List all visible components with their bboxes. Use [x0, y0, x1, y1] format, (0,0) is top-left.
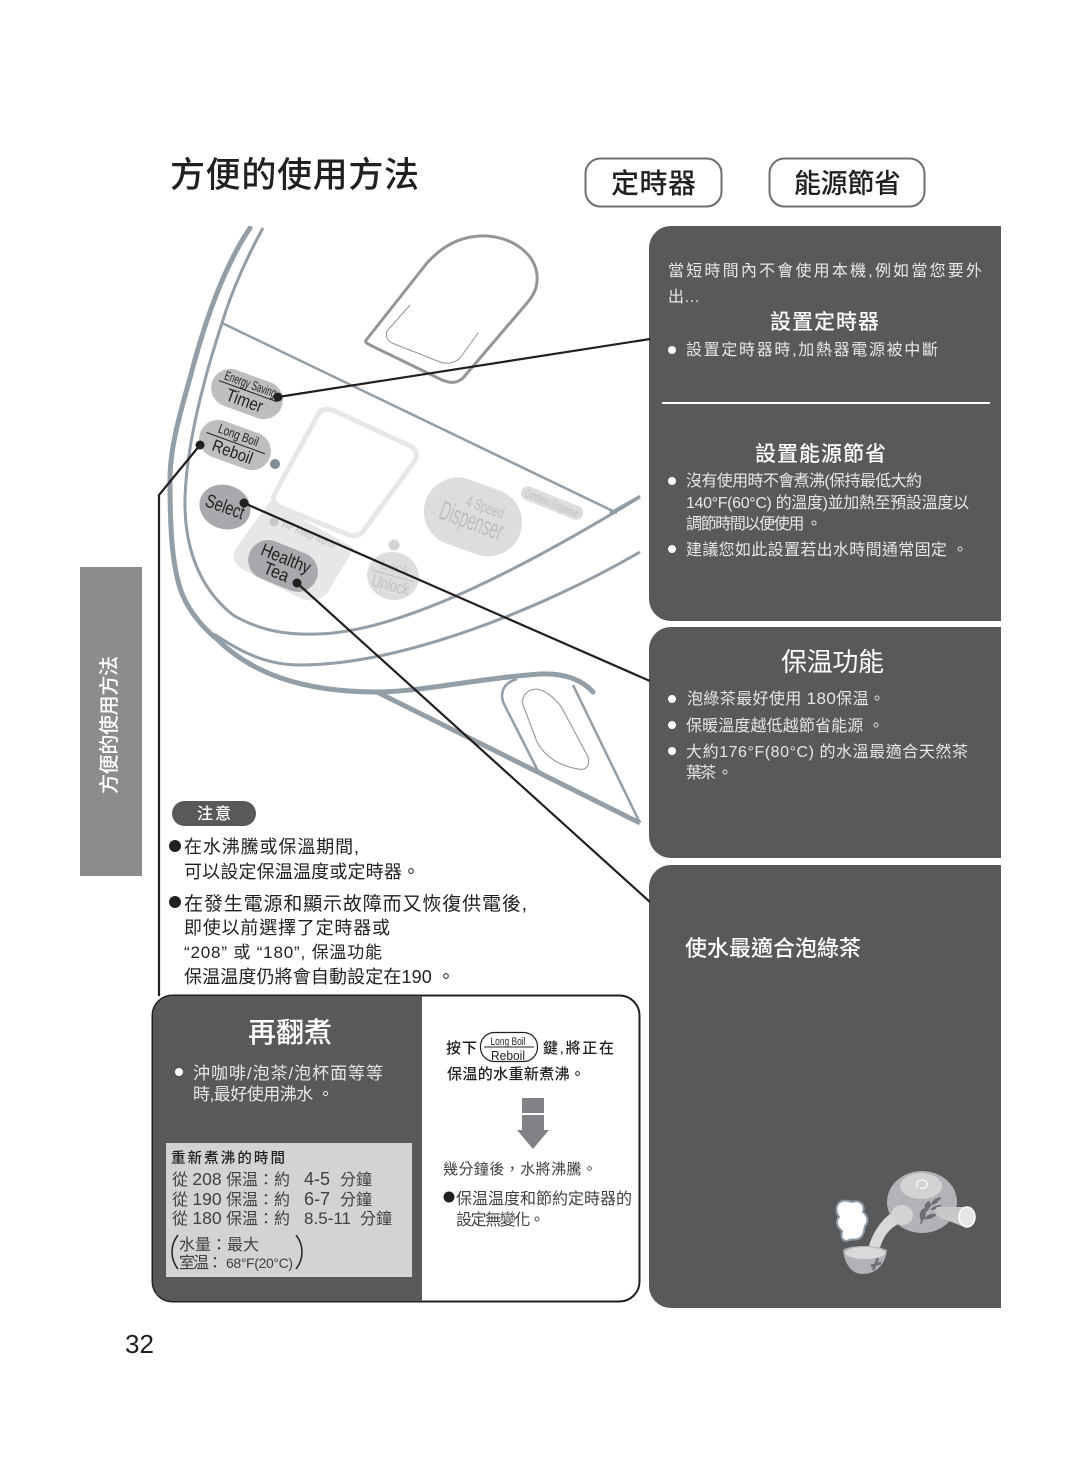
intro text [668, 262, 982, 306]
reboil time table: 分鐘 [360, 1210, 392, 1228]
reboil dark column [153, 996, 422, 1301]
keep-warm area [234, 501, 354, 600]
keep warm notes: 大約176°F(80°C) 的水溫最適合天然茶 [686, 743, 968, 761]
reboil note: 沖咖啡/泡茶/泡杯面等等 [193, 1064, 383, 1083]
button: cordless dispense [521, 486, 583, 520]
reboil time table: 4-5 [304, 1169, 330, 1189]
connector dots [196, 392, 302, 588]
reboil time table: 分鐘 [340, 1171, 372, 1189]
indicator lights [270, 459, 400, 550]
reboil time table: 8.5-11 [304, 1209, 351, 1228]
keep warm notes: 保暖溫度越低越節省能源 。 [686, 716, 884, 735]
energy note one [668, 471, 969, 533]
tag: energy saving: 能源節省 [794, 169, 901, 199]
button: dispenser [424, 478, 522, 556]
instruction: press reboil: Long Boil [490, 1036, 526, 1048]
button: lock unlock [367, 552, 419, 600]
tag: energy saving [770, 158, 924, 206]
heading: reboil: 再翻煮 [248, 1017, 332, 1048]
instruction: press reboil: 保温的水重新煮沸。 [447, 1065, 585, 1083]
energy note two: 建議您如此設置若出水時間通常固定 。 [686, 541, 968, 559]
note two: “208” 或 “180”, 保溫功能 [184, 943, 382, 962]
reboil note [175, 1064, 383, 1104]
notice section [169, 801, 527, 987]
instruction: press reboil: 鍵,將正在 [543, 1039, 614, 1057]
body outlines [170, 228, 640, 823]
button: healthy tea: Healthy [258, 540, 314, 578]
note two: 即使以前選擇了定時器或 [184, 918, 390, 938]
button: long boil reboil: Long Boil [216, 421, 261, 449]
reboil time table: 室温： [179, 1254, 223, 1272]
reboil time table: 6-7 [304, 1189, 330, 1209]
reboil time table: 從 208 保温：約 [172, 1169, 290, 1189]
reboil time table: 重新煮沸的時間 [171, 1149, 285, 1167]
note one: 在水沸騰或保溫期間, [184, 837, 359, 857]
note two: 在發生電源和顯示故障而又恢復供電後, [184, 893, 527, 915]
intro text: 出… [668, 288, 700, 306]
reboil time table: 68°F(20°C) [226, 1255, 293, 1271]
result text: 幾分鐘後，水將沸騰。 [443, 1160, 597, 1178]
side tab: 方便的使用方法 [98, 656, 121, 794]
result note: 保温温度和節約定時器的 [456, 1189, 632, 1208]
panel: best water for green tea [649, 865, 1001, 1308]
panel: reboil [152, 996, 640, 1302]
display window [273, 409, 416, 536]
side tab [80, 567, 142, 876]
result note: 設定無變化。 [456, 1211, 545, 1229]
heading: set timer: 設置定時器 [770, 311, 879, 334]
note one [169, 837, 420, 882]
button: select: Select [202, 491, 248, 524]
panel: keep warm function [649, 627, 1001, 858]
reboil time table: 水量：最大 [179, 1236, 259, 1254]
notice badge [172, 801, 256, 826]
illustration: control panel of the pot [170, 228, 640, 823]
page title: 方便的使用方法 [170, 156, 419, 195]
lid handle [366, 236, 537, 382]
heading: set energy saving: 設置能源節省 [755, 443, 886, 466]
button: cordless dispense: Cordless Dispense [522, 488, 581, 520]
button: healthy tea [248, 540, 318, 592]
button: dispenser: Dispenser [435, 495, 508, 546]
note two [169, 893, 527, 987]
keep warm notes: 泡綠茶最好使用 180保温。 [687, 689, 885, 708]
button: lock unlock: Unlock [370, 571, 412, 599]
button: healthy tea: Tea [260, 558, 293, 586]
note two: 保温温度仍將會自動設定在190 。 [184, 967, 455, 987]
connector lines [159, 339, 650, 996]
notice badge: 注意 [197, 804, 231, 823]
reboil time table: 從 180 保温：約 [172, 1208, 290, 1228]
button: long boil reboil [199, 420, 271, 470]
instruction: press reboil: Reboil [491, 1048, 525, 1063]
button: energy saving timer [211, 368, 283, 420]
button: select [199, 484, 251, 530]
tag: timer [586, 158, 722, 206]
reboil note: 時,最好使用沸水 。 [193, 1084, 334, 1104]
reboil time table: 從 190 保温：約 [172, 1189, 290, 1209]
result note [444, 1189, 632, 1229]
heading: green tea: 使水最適合泡綠茶 [685, 936, 861, 961]
energy note one: 沒有使用時不會煮沸(保持最低大約 [686, 471, 922, 490]
intro text: 當短時間內不會使用本機,例如當您要外 [668, 262, 982, 280]
heading: keep warm: 保温功能 [781, 647, 884, 677]
keep warm notes: 葉茶 。 [686, 764, 733, 782]
reboil time table [166, 1143, 412, 1277]
tag: timer: 定時器 [611, 168, 696, 199]
button: lock unlock: Lock [379, 556, 413, 579]
energy note one: 調節時間以便使用 。 [686, 514, 822, 533]
panel: timer and energy saving [649, 226, 1001, 621]
button: long boil reboil: Reboil [209, 436, 255, 468]
page number: 32 [125, 1329, 154, 1359]
button: energy saving timer: Timer [223, 385, 266, 416]
arrow down [517, 1098, 549, 1149]
keep warm notes [668, 689, 968, 782]
button: energy saving timer: Energy Saving [223, 368, 279, 400]
reboil time table: 分鐘 [340, 1191, 372, 1209]
instruction: press reboil: 按下 [446, 1040, 477, 1057]
label: VIP keep warm: VIP Keep warm [279, 516, 338, 551]
timer note: 設置定時器時,加熱器電源被中斷 [686, 341, 938, 359]
instruction: press reboil [446, 1032, 614, 1083]
button: dispenser: 4 Speed [463, 493, 506, 523]
icon: teapot pouring tea [836, 1171, 975, 1274]
energy note one: 140°F(60°C) 的溫度)並加熱至預設溫度以 [686, 494, 969, 512]
note one: 可以設定保温温度或定時器。 [184, 862, 420, 882]
